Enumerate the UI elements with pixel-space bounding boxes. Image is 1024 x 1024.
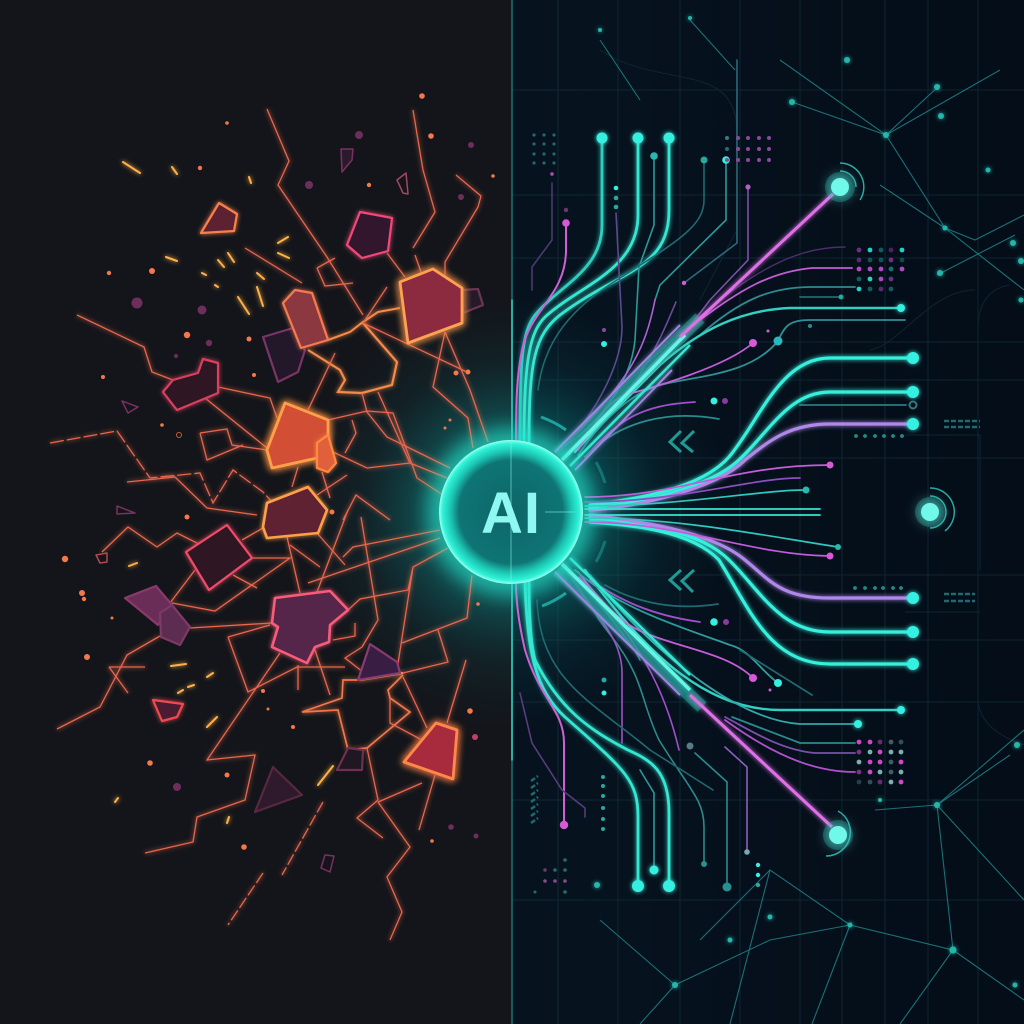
shard: large top right	[400, 269, 462, 343]
dot matrix: bottom left	[534, 858, 567, 894]
shard: dim lower center	[337, 748, 363, 770]
bottom bundle bright	[525, 582, 669, 886]
shard: bright orange	[267, 403, 328, 468]
panel: right ordered background	[512, 0, 1024, 1024]
right circuit lines	[512, 0, 912, 1024]
network: bottom right	[594, 730, 1024, 1024]
AI label: AI	[481, 481, 541, 546]
dot matrix: upper right	[857, 248, 904, 291]
terminal dots	[550, 132, 919, 892]
shard: lower right	[404, 723, 457, 779]
network: top right	[598, 16, 1024, 302]
shard: orange mid	[263, 487, 327, 538]
node: top right target	[825, 163, 864, 202]
node: right target	[915, 488, 954, 531]
shard: violet behind	[263, 328, 305, 382]
bottom bundle thin	[516, 573, 747, 887]
shard: pink mid left	[186, 525, 252, 590]
AI core	[427, 428, 595, 596]
shard: pink upper	[347, 212, 392, 258]
ray: upper right	[555, 194, 833, 470]
panel: left chaos background	[0, 0, 512, 1024]
chevrons	[670, 431, 694, 592]
outlined debris	[96, 149, 408, 872]
shards	[96, 149, 483, 872]
shard: dim center	[358, 644, 400, 680]
top bundle thin	[516, 60, 748, 450]
shard: dark left	[163, 359, 218, 410]
hatch marks	[531, 421, 980, 823]
faint circuit grid	[512, 0, 1024, 1024]
right main curves	[590, 358, 912, 664]
sparks and debris	[62, 93, 495, 850]
shard: mauve left fragment	[160, 605, 190, 645]
top bundle bright	[520, 138, 669, 442]
shard: orange center top	[283, 290, 328, 348]
dot rows	[853, 434, 904, 590]
dot matrix: top center	[725, 136, 771, 162]
arcs around the core	[541, 417, 605, 606]
shard: mauve left	[125, 586, 172, 625]
shard: large top right back	[462, 289, 483, 313]
center glow	[296, 297, 726, 727]
upper right branches	[575, 247, 906, 457]
shard: bright orange fragment	[317, 435, 336, 472]
shard: upper small	[201, 203, 237, 233]
shard: small lower	[153, 700, 183, 721]
shard: large mauve	[272, 591, 348, 663]
shard: dim lower	[255, 767, 302, 812]
lower right branches	[575, 570, 900, 772]
dot matrix: top left	[532, 133, 556, 165]
ray: center right	[585, 510, 920, 514]
ray: lower right	[555, 558, 832, 827]
node: lower right target	[823, 811, 853, 856]
vertical seam lines	[511, 0, 513, 1024]
center fan	[585, 465, 838, 556]
dot matrix: lower right	[857, 740, 903, 784]
left cracks network	[50, 109, 488, 940]
